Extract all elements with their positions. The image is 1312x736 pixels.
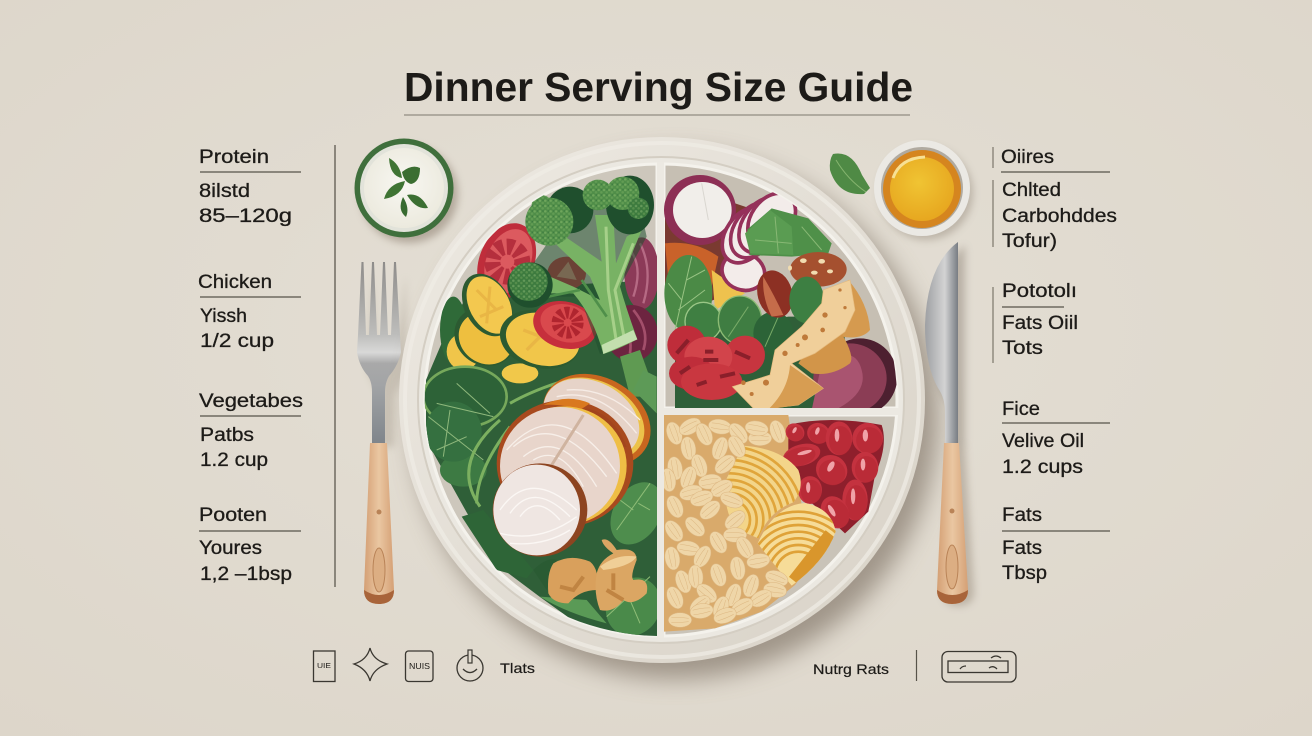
label: pooten: Pooten: [199, 505, 267, 526]
squash slices: [440, 274, 579, 384]
label: fats: Fats: [1002, 505, 1042, 526]
icon: nuts card: [406, 651, 433, 682]
label: vegetables: Vegetabes: [199, 391, 303, 412]
label: pototoli: Tots: [1002, 338, 1043, 359]
label: oiires: Carbohddes: [1002, 206, 1117, 227]
label: chicken: Yissh: [200, 306, 247, 327]
legend text: Nutrg Rats: [813, 661, 889, 677]
label: protein: 85–120g: [199, 206, 292, 227]
turkey slice: back: [543, 374, 651, 460]
broccoli: [507, 176, 654, 354]
bottom legend: left icons: [314, 648, 535, 682]
label: chicken: Chicken: [198, 272, 272, 293]
label: fats: Tbsp: [1002, 563, 1047, 584]
pasta shell: large: [726, 446, 801, 538]
label: fice: [1002, 399, 1110, 478]
sweet potato: [812, 338, 897, 415]
label: pooten: [199, 505, 301, 585]
label: fice: 1.2 cups: [1002, 457, 1083, 478]
knife handle: [937, 443, 968, 604]
spinach leaf: [664, 255, 786, 347]
label: fats: Fats: [1002, 538, 1042, 559]
panel: grains, pasta and beans: [657, 414, 884, 638]
knife: [925, 242, 974, 606]
oil bowl: [874, 140, 973, 240]
title: Dinner Serving Size Guide: [404, 64, 913, 110]
panel: vegetables and turkey: [423, 176, 674, 646]
turkey slice: front: [493, 463, 587, 557]
label: vegetables: 1.2 cup: [200, 450, 268, 471]
label: oiires: Chlted: [1002, 180, 1061, 201]
icon: label card: UIE: [317, 661, 331, 670]
bread: [732, 280, 855, 410]
walnuts: [548, 539, 647, 611]
label: oiires: Oiires: [1001, 147, 1054, 168]
icon: tray: [942, 652, 1016, 682]
striped radish: [720, 192, 798, 292]
label: pototoli: Pototolı: [1002, 281, 1077, 302]
label: oiires: [1001, 147, 1117, 252]
turkey slice: middle: [497, 399, 633, 527]
label: protein: Protein: [199, 147, 269, 168]
fork: [357, 262, 406, 604]
label: pototoli: Fats Oiil: [1002, 313, 1078, 334]
left column: serving labels: [198, 147, 303, 585]
tomato slice: [533, 301, 596, 349]
label: chicken: [198, 272, 301, 352]
label: pooten: 1,2 –1bsp: [200, 564, 292, 585]
almond: [788, 252, 847, 287]
label: fice: Velive Oil: [1002, 431, 1084, 452]
vegetables: squash, tomato and broccoli: [440, 176, 659, 397]
label: protein: [199, 147, 301, 227]
label: pooten: Youres: [199, 538, 262, 559]
bottom legend: right: [813, 650, 1016, 682]
icon: label card: [314, 651, 335, 682]
dressing bowl: [354, 138, 458, 243]
radish: [664, 175, 736, 245]
right column: serving labels: [993, 147, 1117, 584]
oats: [659, 414, 790, 627]
label: vegetables: [199, 391, 303, 471]
label: vegetables: Patbs: [200, 425, 254, 446]
tomato slice: [477, 223, 536, 298]
panel: salad, bread and sweet potato: [664, 175, 897, 415]
label: chicken: 1/2 cup: [200, 331, 274, 352]
beans: [780, 420, 883, 534]
pecan: [757, 270, 792, 318]
roasted potato wedges: [798, 280, 870, 374]
icon: nuts card: NUIS: [409, 661, 430, 671]
label: protein: 8ilstd: [199, 181, 250, 202]
pasta shell: small: [758, 503, 836, 586]
turkey, spinach and walnuts: [423, 356, 674, 646]
tomato pieces: [667, 326, 765, 400]
icon: four-point star: [354, 648, 387, 681]
plate: [399, 137, 938, 679]
salad leaves: [745, 208, 832, 257]
label: fice: Fice: [1002, 399, 1040, 420]
fork handle: [364, 443, 394, 604]
label: fats: [1002, 505, 1110, 584]
label: oiires: Tofur): [1002, 231, 1057, 252]
icon: herb leaves: [384, 158, 428, 217]
label: pototoli: [1002, 281, 1078, 359]
icon: basil leaf: [830, 153, 870, 194]
icon: power dial: [457, 650, 483, 681]
spinach leaves: [423, 367, 674, 646]
legend text: Tlats: [500, 660, 535, 676]
